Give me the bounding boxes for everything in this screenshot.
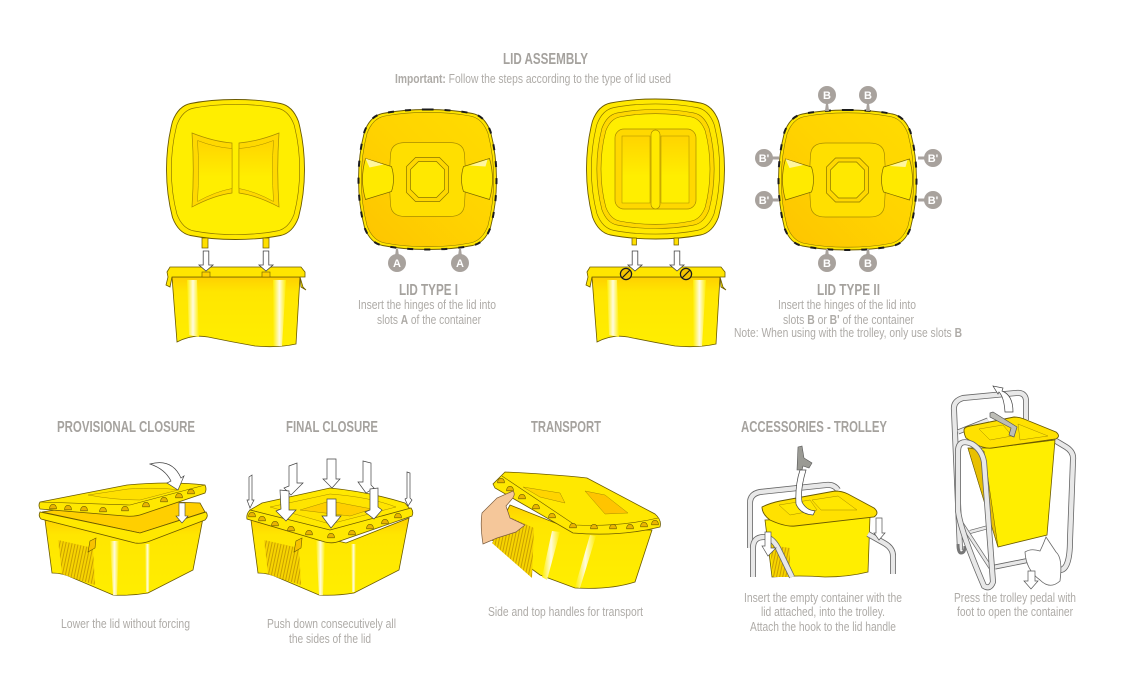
heading: FINAL CLOSURE (286, 419, 378, 436)
text block: Insert the hinges of the lid into (358, 298, 496, 312)
icon: trolley front frame (958, 442, 993, 587)
icon: badge A left: A (393, 258, 401, 270)
text block: Push down consecutively all (267, 617, 396, 631)
arrows: front row pushing down (276, 488, 382, 528)
arrow: lower lid curved (150, 463, 184, 490)
icon: badges B (818, 86, 877, 272)
panel: transport (481, 419, 660, 619)
panel: lid type I hinge view (166, 100, 306, 347)
icon: badges B: B (823, 258, 831, 270)
panel: lid type II underside (734, 86, 962, 340)
arrow: down (176, 503, 188, 523)
text block (744, 591, 902, 634)
icon: badges B prime: B' (928, 153, 939, 165)
panel: lid type I underside (358, 110, 496, 327)
text block: lid attached, into the trolley. (761, 605, 885, 619)
icon: closed container (247, 488, 413, 595)
panel: accessories trolley insert (741, 419, 902, 634)
icon: lid underside (358, 110, 496, 250)
icon: lid top view (166, 100, 304, 240)
icon: trolley back frame (954, 393, 1073, 570)
arrow: insert hinges (199, 251, 273, 271)
text block (267, 617, 396, 646)
icon: prohibited slots (620, 268, 692, 280)
icon: badge A left (388, 249, 406, 272)
text block: Attach the hook to the lid handle (750, 620, 896, 634)
text block (734, 298, 962, 340)
icon: slots (202, 272, 270, 277)
icon: badges B prime: B' (928, 195, 939, 207)
panel: provisional closure (39, 419, 207, 631)
text block: Insert the empty container with the (744, 591, 902, 605)
icon: container body with open lid (39, 483, 207, 595)
text block (358, 298, 496, 327)
text block: Insert the hinges of the lid into (778, 298, 916, 312)
panel: final closure (247, 419, 413, 646)
heading: LID TYPE II (817, 282, 880, 299)
icon: badge A right (451, 249, 469, 272)
text block: foot to open the container (957, 605, 1073, 619)
text block: Press the trolley pedal with (954, 591, 1076, 605)
icon: badges B: B (864, 90, 872, 102)
arrow: insert hinges (628, 251, 684, 271)
icon: badges B prime (755, 149, 942, 209)
icon: badges B prime: B' (759, 153, 770, 165)
heading: ACCESSORIES - TROLLEY (741, 419, 887, 436)
arrow: right down (874, 518, 885, 540)
icon: tall container (964, 417, 1058, 547)
text block (954, 591, 1076, 619)
heading: TRANSPORT (531, 419, 601, 436)
icon: foot on pedal (1025, 537, 1061, 585)
icon: hand gripping handle (481, 491, 525, 544)
heading: PROVISIONAL CLOSURE (57, 419, 195, 436)
icon: lid hinges (202, 238, 269, 248)
text block: Lower the lid without forcing (61, 617, 190, 631)
icon: trolley frame back (750, 485, 838, 548)
icon: trolley frame front (753, 534, 893, 577)
panel: accessories trolley pedal (954, 386, 1076, 619)
text block: the sides of the lid (289, 632, 371, 646)
icon: hook handle (990, 412, 1017, 437)
panel: lid type II hinge view (586, 99, 726, 347)
icon: lid top view with rib (586, 99, 724, 239)
icon: badges B: B (823, 90, 831, 102)
icon: container in trolley (762, 491, 877, 577)
icon: badge A right: A (456, 258, 464, 270)
text block: slots B or B' of the container (783, 313, 914, 327)
title: LID ASSEMBLY (503, 51, 588, 68)
icon: hook and curved arrow (796, 446, 815, 515)
icon: lid hinges (632, 238, 678, 245)
arrows: back row pushing down (247, 459, 412, 508)
icon: badges B: B (864, 258, 872, 270)
arrow: left insert (762, 532, 776, 556)
text block: Side and top handles for transport (488, 605, 643, 619)
subtitle: Important: Follow the steps according to the type of lid used (395, 72, 671, 86)
icon: container front (166, 267, 306, 347)
heading: LID TYPE I (399, 282, 458, 299)
text block: slots A of the container (377, 313, 481, 327)
icon: lid underside (778, 110, 916, 250)
icon: tilted container (492, 472, 660, 588)
text block: Note: When using with the trolley, only use slots B (734, 326, 962, 340)
arrow: pedal down (1024, 571, 1038, 589)
icon: container front (586, 267, 726, 347)
arrow: curved up (993, 386, 1013, 412)
icon: badges B prime: B' (759, 195, 770, 207)
